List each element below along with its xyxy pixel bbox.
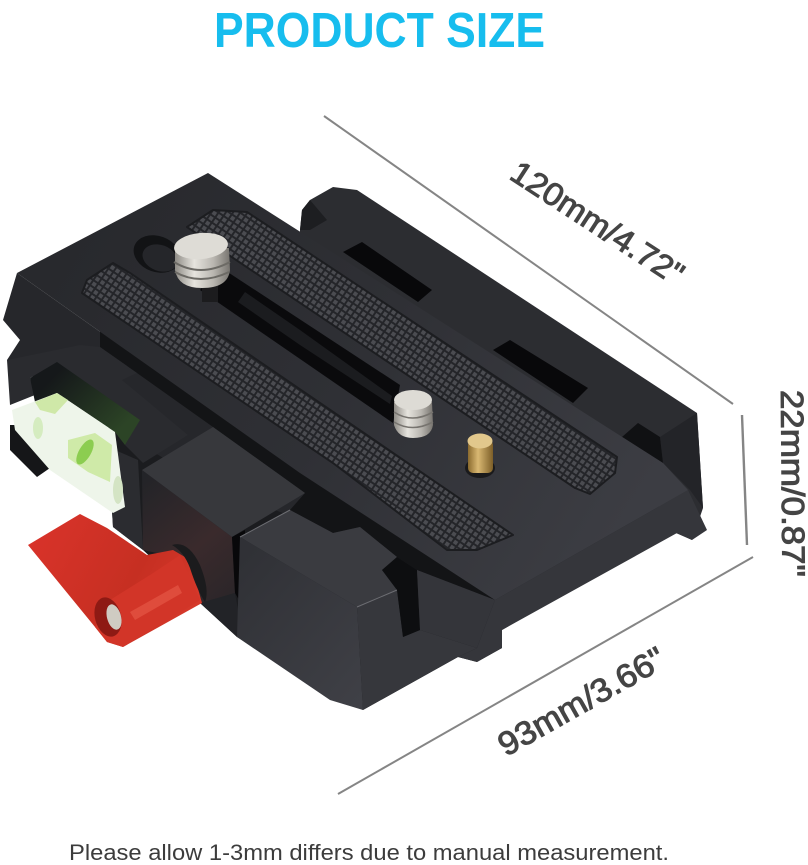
product: quick release plate [3,173,707,710]
dimension: width 93mm [338,557,753,794]
front rail end [382,490,707,662]
brass pin [465,434,495,478]
shadow channel under plate [100,330,495,600]
bubble level [12,393,125,513]
title: PRODUCT SIZE [214,4,545,58]
centre slot [200,267,400,423]
dimension: width 93mm: 93mm/3.66" [491,639,671,763]
dark backing silhouette [108,300,688,710]
knurled strip rear [187,210,617,494]
left clamp block [7,345,188,550]
top plate surface [17,173,688,600]
right clamp block [237,510,477,710]
knurled strip front [82,263,513,550]
small screw [394,390,433,438]
red lever [28,514,202,647]
dimension: length 120mm [324,116,733,404]
underbody side [3,273,495,640]
large screw [173,231,230,302]
lock block [142,427,305,637]
dimension: length 120mm: 120mm/4.72" [504,154,691,292]
dimension: height 22mm [742,390,808,577]
counterbore [128,229,186,279]
rubber o-ring [172,544,207,602]
footnote: Please allow 1-3mm differs due to manual measurement. [69,840,669,865]
rear clamp rail [300,187,703,540]
